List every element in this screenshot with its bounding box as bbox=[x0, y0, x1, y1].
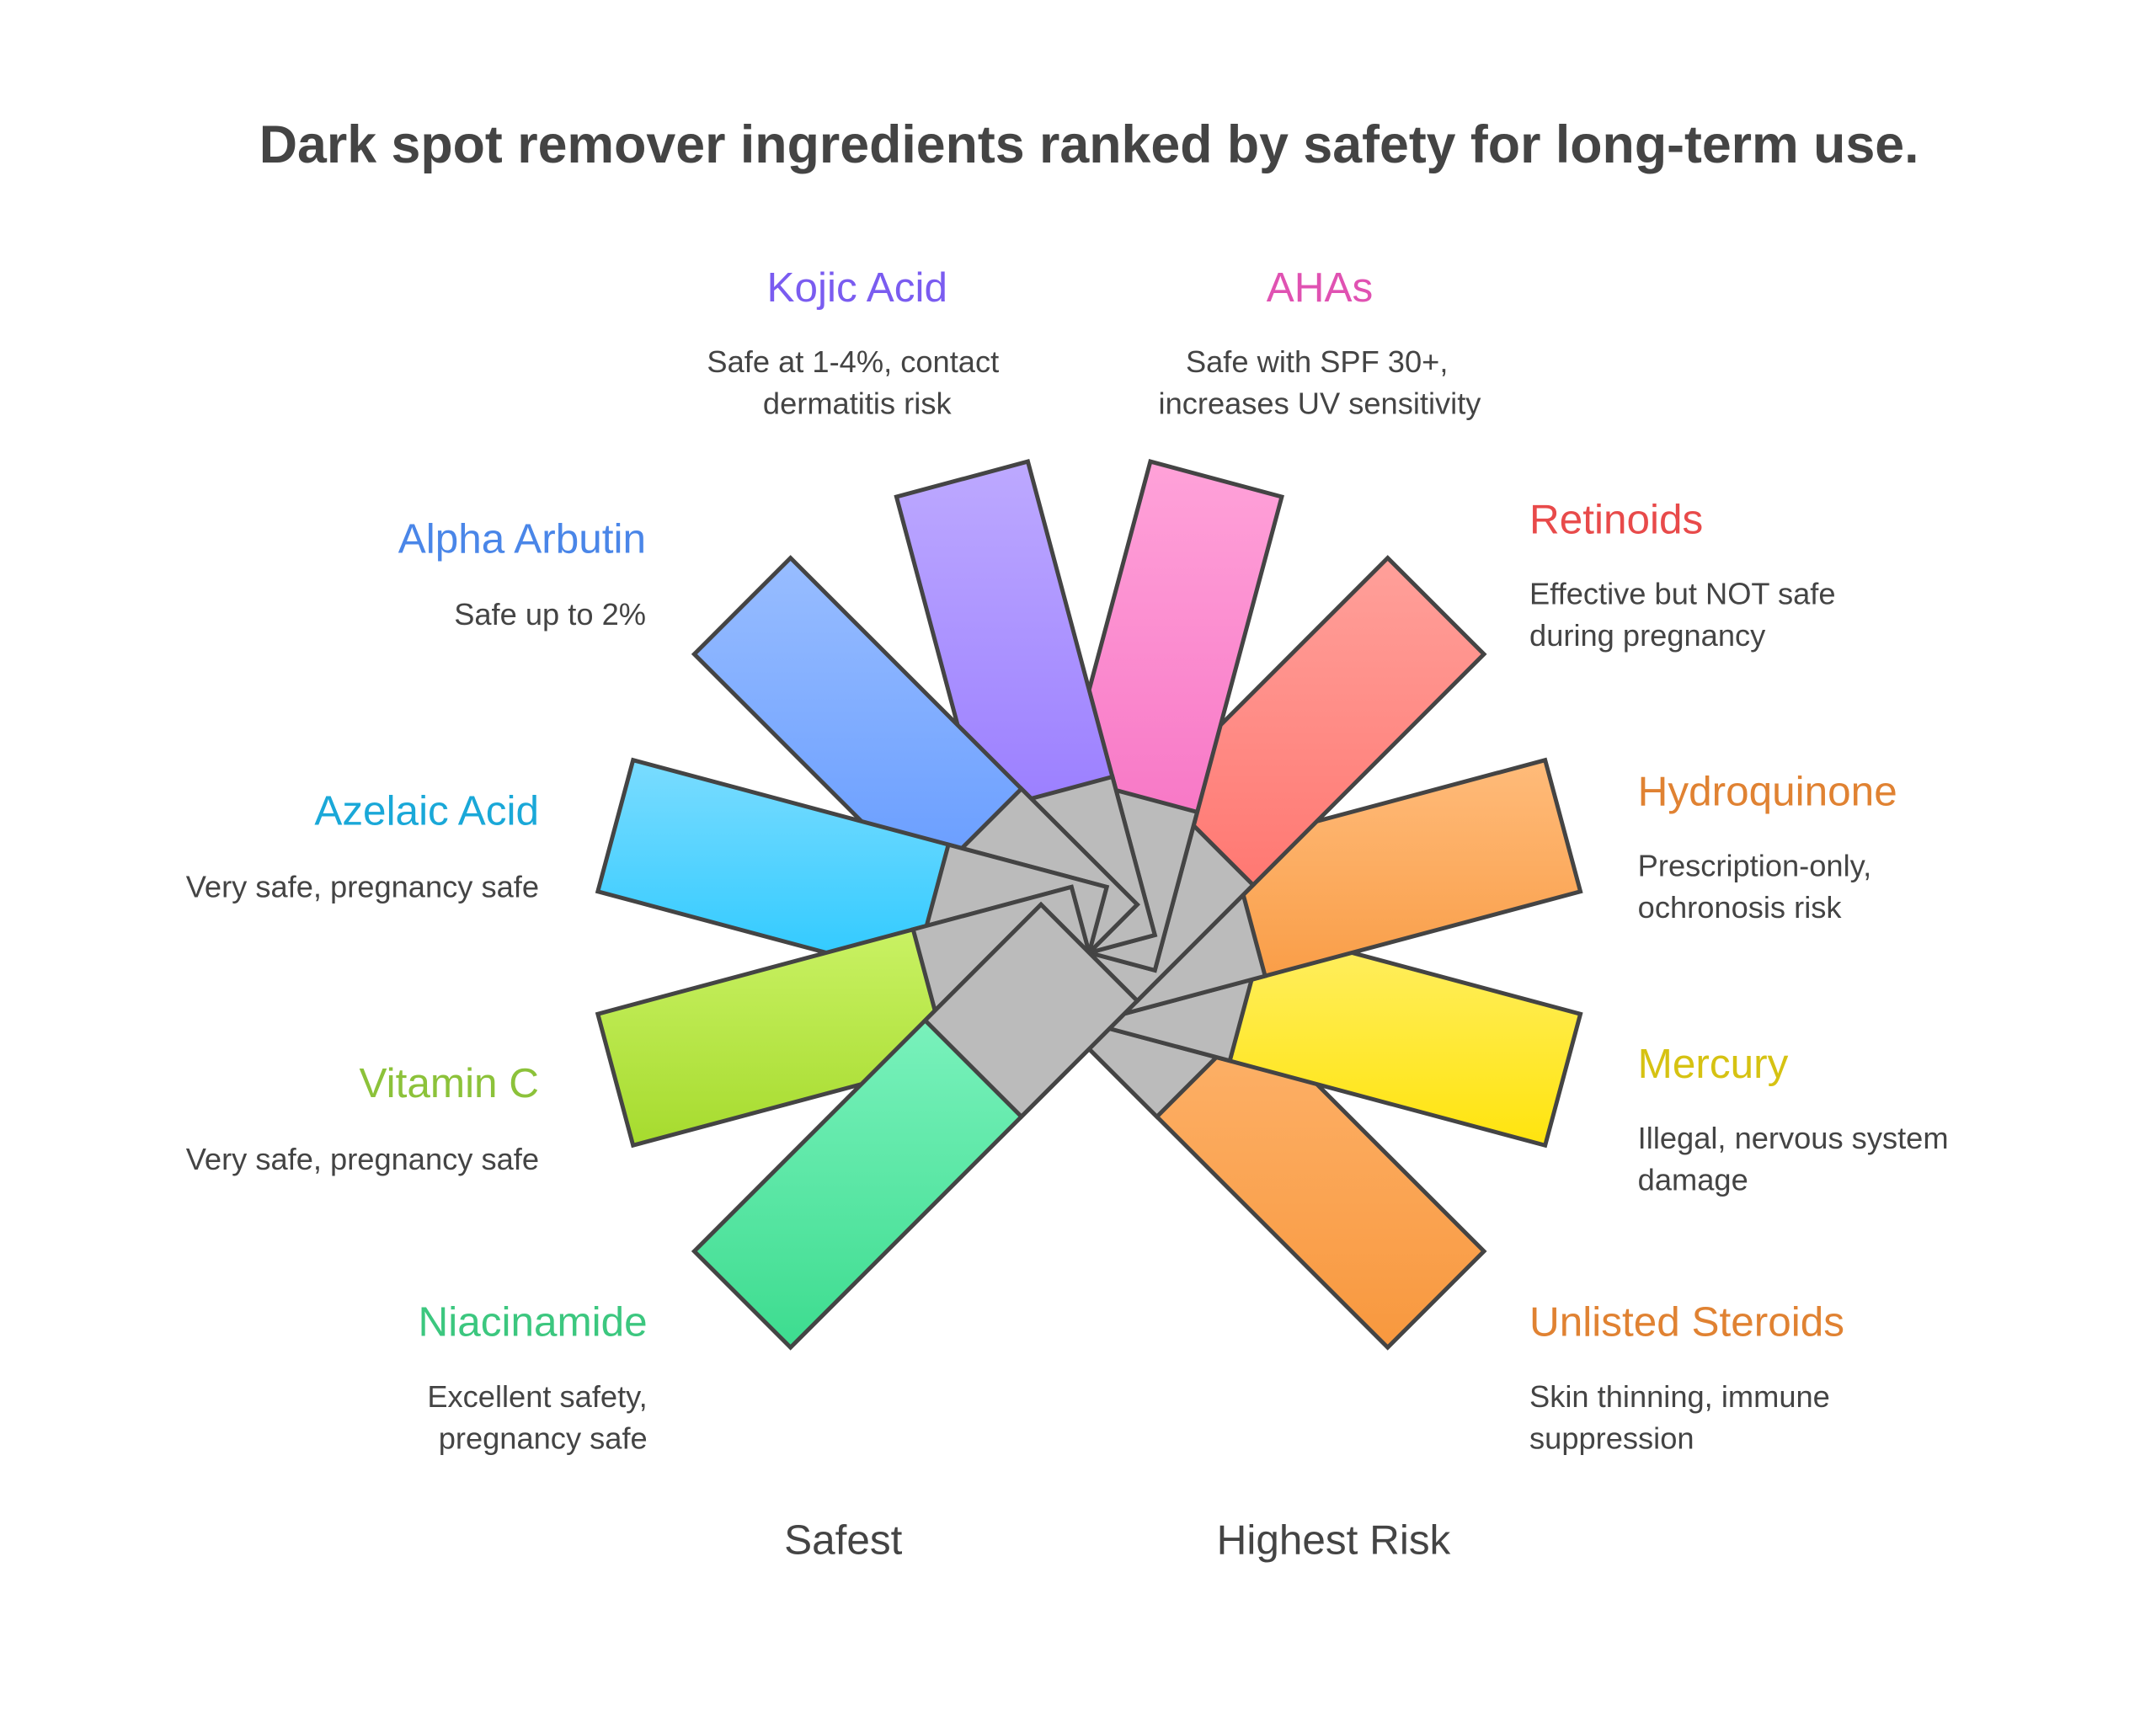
label: Retinoids: Effective but NOT safe bbox=[1529, 576, 1836, 610]
label: Hydroquinone: Prescription-only, bbox=[1638, 849, 1871, 883]
label: Unlisted Steroids bbox=[1529, 1299, 1844, 1455]
axis label: Safest: Safest bbox=[784, 1517, 903, 1564]
label: AHAs: increases UV sensitivity bbox=[1159, 386, 1481, 421]
label: Unlisted Steroids: Skin thinning, immune bbox=[1529, 1379, 1830, 1414]
label: Azelaic Acid bbox=[186, 788, 539, 903]
label: Unlisted Steroids: Unlisted Steroids bbox=[1529, 1299, 1844, 1346]
label: Retinoids bbox=[1529, 496, 1836, 653]
axis label: Highest Risk: Highest Risk bbox=[1217, 1517, 1451, 1564]
bar: Unlisted Steroids bbox=[1041, 904, 1484, 1347]
bar: AHAs bbox=[1023, 461, 1282, 970]
label: Vitamin C: Very safe, pregnancy safe bbox=[186, 1142, 539, 1176]
label: Mercury: Illegal, nervous system bbox=[1638, 1121, 1949, 1155]
label: AHAs bbox=[1159, 264, 1481, 421]
label: Unlisted Steroids: suppression bbox=[1529, 1421, 1694, 1455]
label: Kojic Acid: Kojic Acid bbox=[767, 264, 947, 311]
label: Azelaic Acid: Very safe, pregnancy safe bbox=[186, 869, 539, 903]
label: Mercury bbox=[1638, 1041, 1949, 1197]
label: Mercury: damage bbox=[1638, 1162, 1748, 1197]
label: Mercury: Mercury bbox=[1638, 1041, 1789, 1087]
label: Vitamin C: Vitamin C bbox=[360, 1060, 539, 1106]
label: Niacinamide: pregnancy safe bbox=[439, 1421, 648, 1455]
label: Alpha Arbutin: Alpha Arbutin bbox=[398, 515, 646, 562]
pinwheel chart bbox=[598, 461, 1581, 1347]
bar: Alpha Arbutin bbox=[694, 558, 1137, 1001]
bar: Niacinamide bbox=[694, 904, 1137, 1347]
title: Dark spot remover ingredients ranked by safety for long-term use. bbox=[259, 115, 1919, 174]
label: Hydroquinone: Hydroquinone bbox=[1638, 769, 1897, 815]
bar: Kojic Acid bbox=[896, 461, 1155, 970]
bar: Retinoids bbox=[1041, 558, 1484, 1001]
label: Hydroquinone: ochronosis risk bbox=[1638, 890, 1842, 925]
label: Niacinamide bbox=[418, 1299, 648, 1455]
label: AHAs: AHAs bbox=[1267, 264, 1373, 311]
label: Alpha Arbutin bbox=[398, 515, 646, 632]
label: Kojic Acid bbox=[707, 264, 999, 421]
label: Alpha Arbutin: Safe up to 2% bbox=[454, 597, 646, 632]
bar: Mercury bbox=[1071, 887, 1581, 1145]
bar: Vitamin C bbox=[598, 887, 1107, 1145]
label: Vitamin C bbox=[186, 1060, 539, 1176]
label: Retinoids: during pregnancy bbox=[1529, 618, 1766, 653]
label: Azelaic Acid: Azelaic Acid bbox=[314, 788, 539, 834]
label: Retinoids: Retinoids bbox=[1529, 496, 1703, 542]
bar: Azelaic Acid bbox=[598, 760, 1107, 1019]
bar: Hydroquinone bbox=[1071, 760, 1581, 1019]
label: Kojic Acid: dermatitis risk bbox=[763, 386, 952, 421]
label: AHAs: Safe with SPF 30+, bbox=[1186, 344, 1448, 379]
label: Hydroquinone bbox=[1638, 769, 1897, 925]
label: Kojic Acid: Safe at 1-4%, contact bbox=[707, 344, 999, 379]
label: Niacinamide: Niacinamide bbox=[418, 1299, 648, 1346]
label: Niacinamide: Excellent safety, bbox=[427, 1379, 648, 1414]
